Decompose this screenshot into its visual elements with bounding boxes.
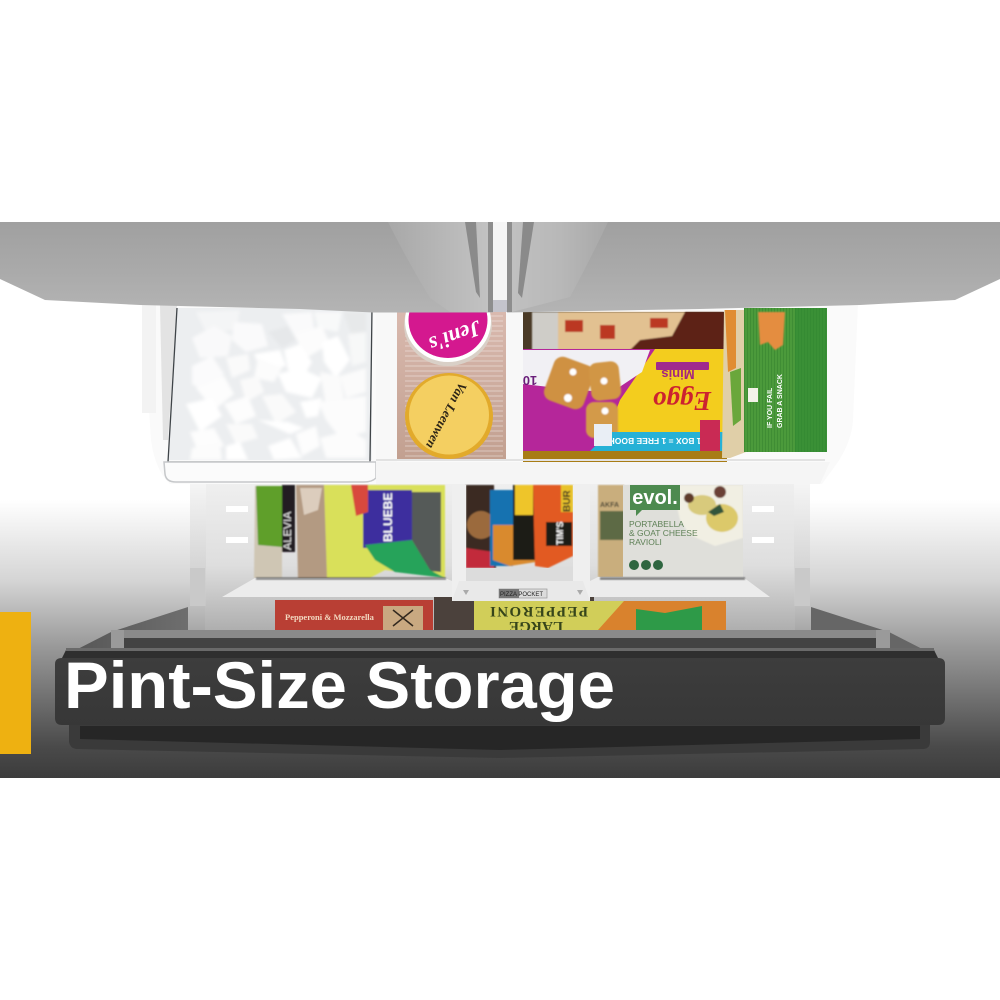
pizza pocket label: PIZZA POCKET <box>500 592 543 598</box>
eggo box: Minis <box>661 367 695 382</box>
panel: drawer front <box>55 607 945 758</box>
red pizza box: Pepperoni & Mozzarella <box>285 612 375 622</box>
frozen box: breakfast spinach: AKFA <box>600 502 619 509</box>
wire shelf edge <box>222 577 770 597</box>
ice cream compartment <box>397 312 506 459</box>
ravioli label: & GOAT CHEESE <box>629 528 698 538</box>
pepperoni pizza box: PEPPERONI <box>490 603 588 619</box>
frozen box: breakfast spinach <box>598 485 624 577</box>
free book banner <box>590 432 727 451</box>
panel: lower freezer drawer interior <box>190 484 810 634</box>
photo backdrop gradient <box>0 222 1000 778</box>
yellow ice cream lid <box>405 373 493 459</box>
breaded food photo <box>758 312 785 350</box>
eggo box: 1 BOX = 1 FREE BOOK <box>608 436 701 446</box>
right hinge wing <box>811 607 934 655</box>
ravioli label: RAVIOLI <box>629 537 662 547</box>
infographic scene <box>0 222 1000 778</box>
frozen box: evol ravioli: evol. <box>632 487 678 509</box>
frozen bags left <box>254 485 445 580</box>
pizza pocket divider <box>452 485 590 601</box>
red pizza box <box>275 600 433 630</box>
left door handle <box>388 222 488 312</box>
frozen box: evol ravioli <box>623 485 743 577</box>
eggo box: 10 <box>523 373 537 388</box>
bin lip <box>164 462 376 482</box>
divider posts <box>376 312 397 480</box>
drawer top trim <box>111 630 889 638</box>
ice cubes <box>186 310 366 460</box>
eggo logo: Eggo <box>653 386 712 416</box>
green food box <box>722 308 827 458</box>
left hinge wing <box>66 607 188 655</box>
frozen snack bags centre: BUR <box>562 490 573 512</box>
pink ice cream lid <box>404 312 492 366</box>
green food box: IF YOU FAIL <box>767 387 774 428</box>
pepperoni pizza box: LARGE <box>509 618 563 634</box>
dark lower drawer gap <box>434 597 594 630</box>
ravioli label: PORTABELLA <box>629 519 684 529</box>
frozen pizza boxes <box>275 600 726 630</box>
freezer food compartment <box>523 312 727 462</box>
pink ice cream lid: Jeni's <box>426 315 486 357</box>
frozen snack bags centre <box>466 485 573 568</box>
pepperoni pizza box <box>474 601 726 630</box>
drawer face <box>55 658 945 725</box>
eggo box <box>523 349 727 452</box>
brown pizza box <box>532 312 724 350</box>
frozen bags left: ALEVIA <box>282 511 294 550</box>
yellow ice cream lid: Van Leeuwen <box>423 380 470 451</box>
accent bar <box>0 612 31 754</box>
panel: stainless refrigerator doors <box>0 222 1000 312</box>
ice bin <box>164 308 376 482</box>
right door handle <box>512 222 608 312</box>
green food box: GRAB A SNACK <box>777 374 784 428</box>
handle recess <box>69 725 930 758</box>
right door <box>507 222 1000 312</box>
ravioli bowl photo <box>672 485 743 546</box>
waffles <box>541 354 622 438</box>
frozen bags left: BLUEBE <box>381 493 395 542</box>
frozen snack bags centre: TIM'S <box>555 521 565 545</box>
panel: upper freezer bin <box>142 305 830 484</box>
left door <box>0 222 493 312</box>
title: Pint-Size Storage <box>64 649 615 722</box>
door gap <box>493 222 507 300</box>
evol logo tab <box>630 485 680 516</box>
